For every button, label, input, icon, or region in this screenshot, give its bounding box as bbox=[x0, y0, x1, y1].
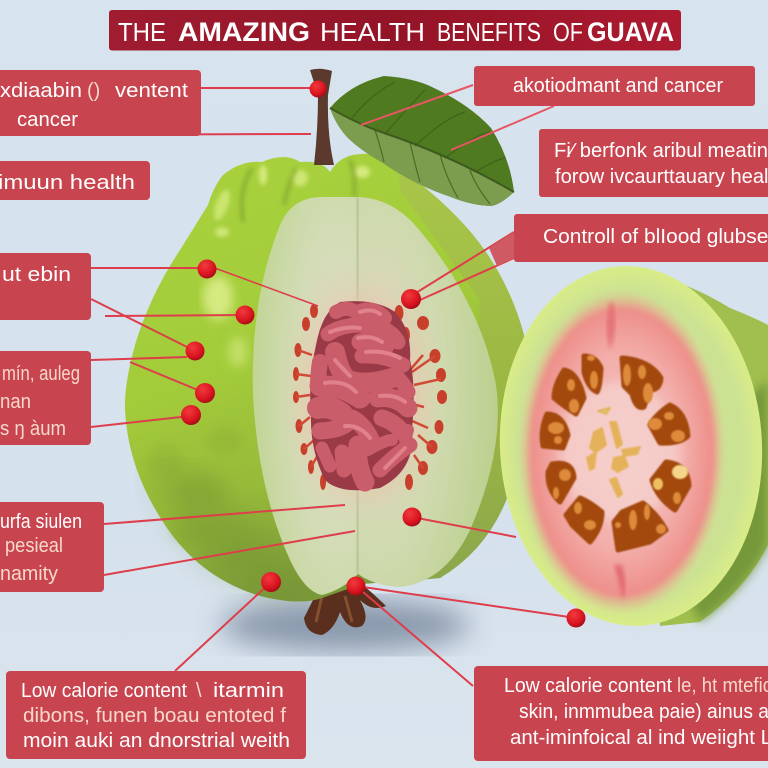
label: gut: ut ebin bbox=[2, 264, 71, 286]
title banner bbox=[109, 10, 681, 50]
title banner: HEALTH bbox=[320, 17, 425, 47]
right guava half: cut face bbox=[491, 259, 768, 633]
label: skin: s ŋ àum bbox=[0, 418, 66, 440]
label: skin bbox=[0, 351, 91, 445]
pointer wedge to blood glucose label bbox=[489, 232, 514, 266]
label: surface: pesieal bbox=[5, 535, 63, 557]
label: fiber and heart health bbox=[539, 129, 768, 197]
label: fiber and heart health: forow ivcaurttauary heall bbox=[555, 166, 768, 188]
label: immune health bbox=[0, 161, 150, 200]
seed strands around core bbox=[293, 304, 447, 490]
label: low calorie right: ant-iminfoical al ind weiight L bbox=[510, 727, 768, 749]
guava leaf bbox=[330, 76, 514, 206]
label: low calorie left: Low calorie content bbox=[21, 680, 187, 702]
red marker dots bbox=[181, 80, 586, 628]
rind shading bbox=[690, 380, 768, 622]
label: surface: namity bbox=[0, 563, 58, 585]
title banner: BENEFITS bbox=[437, 17, 541, 47]
ground shadow bbox=[220, 599, 470, 651]
label: skin: nan bbox=[0, 391, 31, 413]
cut flesh: left half bbox=[253, 197, 358, 595]
right guava half: rind behind bbox=[632, 267, 768, 626]
calyx base bbox=[304, 586, 386, 635]
label: low calorie left: \ bbox=[196, 680, 202, 702]
label: antioxidant left bbox=[0, 70, 201, 136]
label: gut bbox=[0, 253, 91, 320]
title banner: AMAZING bbox=[178, 17, 310, 47]
title banner: GUAVA bbox=[587, 17, 674, 47]
label: low calorie left: dibons, funen boau entoted f bbox=[23, 705, 286, 727]
label: low calorie right bbox=[474, 666, 768, 761]
label: low calorie right: Low calorie content bbox=[504, 675, 672, 697]
label: surface: urfa siulen bbox=[0, 511, 82, 533]
callout lines bbox=[0, 85, 576, 686]
brain-like core bbox=[310, 301, 414, 490]
label: control of blood glucose bbox=[514, 214, 768, 262]
whole guava body bbox=[125, 154, 526, 602]
title banner: OF bbox=[553, 17, 583, 47]
label: antioxidant left: cancer bbox=[17, 109, 78, 131]
label: immune health: imuun health bbox=[0, 172, 135, 194]
pink flesh bbox=[519, 290, 725, 614]
cut flesh: right half bbox=[358, 197, 498, 587]
title banner: THE bbox=[118, 17, 166, 47]
center crease bbox=[357, 197, 358, 574]
label: antioxidant left: () bbox=[87, 80, 100, 102]
label: fiber and heart health: Fi⁄ berfonk aribul meatin bbox=[554, 140, 768, 162]
label: antioxidant and cancer: akotiodmant and cancer bbox=[513, 75, 723, 97]
label: surface bbox=[0, 502, 104, 592]
label: antioxidant and cancer bbox=[474, 66, 755, 106]
label: low calorie left: moin auki an dnorstrial weith bbox=[23, 730, 290, 752]
soft pink glow around core bbox=[296, 290, 428, 500]
label: antioxidant left: ventent bbox=[115, 80, 188, 102]
top lobes bbox=[242, 160, 354, 222]
label: control of blood glucose: Controll of blIood glubsel bbox=[543, 226, 768, 248]
label: low calorie left: itarmin bbox=[213, 680, 284, 702]
guava stem bbox=[310, 69, 334, 165]
label: low calorie left bbox=[6, 671, 306, 759]
skin highlights bbox=[211, 165, 370, 237]
label: antioxidant left: xdiaabin bbox=[0, 80, 82, 102]
seed clusters bbox=[542, 356, 689, 550]
label: skin: mín, auleg bbox=[2, 363, 80, 385]
central core bits bbox=[587, 408, 640, 497]
